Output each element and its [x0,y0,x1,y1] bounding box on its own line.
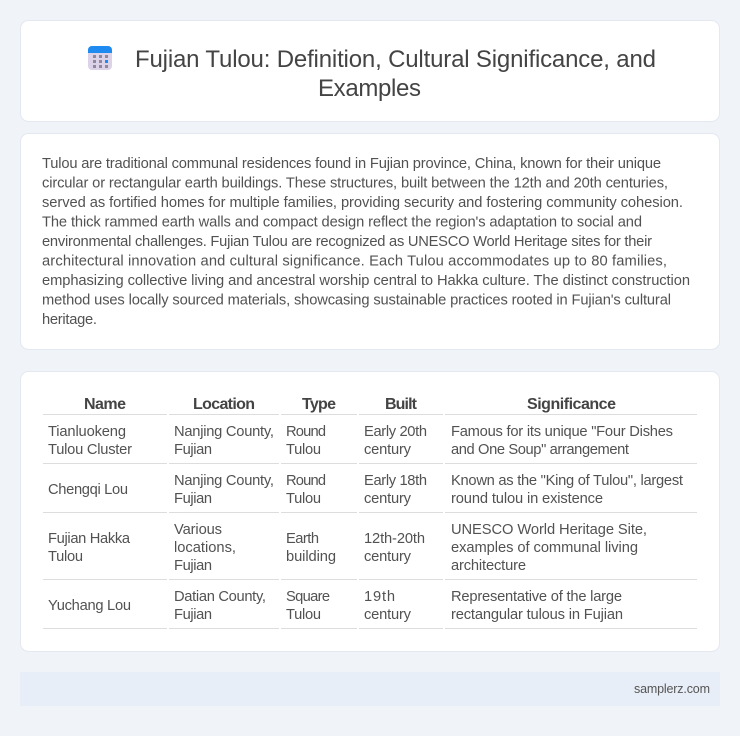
table row: Chengqi Lou: Early 18th [364,473,427,489]
text block: description paragraph: method uses locally sourced materials, showcasing sustainable practices rooted in Fujian's cultural [42,292,671,308]
table row: Yuchang Lou [48,589,623,623]
table row: Fujian Hakka Tulou: Fujian Hakka [48,531,131,547]
table row: Yuchang Lou: Fujian [174,607,212,623]
table row: Tianluokeng Tulou Cluster: Nanjing County, [174,424,274,440]
table row: Chengqi Lou: Round [286,473,326,489]
title [135,46,656,102]
icon: calendar [88,46,112,70]
table row: Chengqi Lou: Chengqi Lou [48,482,128,498]
table header row: Significance [527,396,616,413]
text block: description paragraph: environmental challenges. Fujian Tulou are recognized as UNESCO World Heritage sites for their [42,234,652,250]
table row: Tianluokeng Tulou Cluster: Fujian [174,442,212,458]
table row: Chengqi Lou: round tulou in existence [451,491,603,507]
table row: Tianluokeng Tulou Cluster: Tianluokeng [48,424,126,440]
text block: description paragraph: architectural innovation and cultural significance. Each Tulou accommodates up to 80 families, [42,254,667,270]
table row: Tianluokeng Tulou Cluster: Famous for its unique "Four Dishes [451,424,673,440]
table row: Yuchang Lou: 19th [364,589,395,605]
table row: Tianluokeng Tulou Cluster: Early 20th [364,424,427,440]
table row: Fujian Hakka Tulou: building [286,549,336,565]
text block: description paragraph: heritage. [42,312,97,328]
table row: Tianluokeng Tulou Cluster: Tulou [286,442,321,458]
table row: Yuchang Lou: Representative of the large [451,589,622,605]
text block: description paragraph: served as fortified homes for multiple families, providing security and fostering community cohesion. [42,195,683,211]
title: Examples [318,75,421,102]
table row: Chengqi Lou: Fujian [174,491,212,507]
table row: Yuchang Lou: Square [286,589,330,605]
table row: Fujian Hakka Tulou: century [364,549,412,565]
table row: Fujian Hakka Tulou [48,522,647,574]
table row: Tianluokeng Tulou Cluster [48,424,673,458]
table row: Fujian Hakka Tulou: architecture [451,558,526,574]
table header row: Type [302,396,336,413]
table header row: Location [193,396,255,413]
table row: Fujian Hakka Tulou: Tulou [48,549,83,565]
panel: table [20,372,720,652]
table row: Tianluokeng Tulou Cluster: Tulou Cluster [48,442,132,458]
text block: description paragraph: circular or rectangular earth buildings. These structures, built between the 12th and 20th centuries, [42,176,668,192]
title: Fujian Tulou: Definition, Cultural Significance, and [135,46,656,73]
text block: description paragraph [42,156,690,328]
footer text: samplerz.com: samplerz.com [634,682,710,696]
text block: description paragraph: emphasizing collective living and ancestral worship central to Hakka culture. The distinct construction [42,273,690,289]
table row: Fujian Hakka Tulou: 12th-20th [364,531,425,547]
table row: Yuchang Lou: rectangular tulous in Fujian [451,607,623,623]
table header row: Name [84,396,126,413]
table row: Yuchang Lou: century [364,607,412,623]
table row: Tianluokeng Tulou Cluster: century [364,442,412,458]
table row: Fujian Hakka Tulou: examples of communal living [451,540,638,556]
table header row [84,396,616,413]
table row: Fujian Hakka Tulou: locations, [174,540,236,556]
table row: Yuchang Lou: Datian County, [174,589,266,605]
table header row: Built [385,396,418,413]
table row: Fujian Hakka Tulou: Earth [286,531,319,547]
table row: Tianluokeng Tulou Cluster: Round [286,424,326,440]
table row: Chengqi Lou: century [364,491,412,507]
table row: Fujian Hakka Tulou: Fujian [174,558,212,574]
text block: description paragraph: The thick rammed earth walls and compact design reflect the region's adaptation to social and [42,214,642,230]
panel: description [20,134,720,350]
table row: Fujian Hakka Tulou: Various [174,522,222,538]
table row: Tianluokeng Tulou Cluster: and One Soup" arrangement [451,442,629,458]
table row: Chengqi Lou [48,473,683,507]
table row: Yuchang Lou: Tulou [286,607,321,623]
text block: description paragraph: Tulou are traditional communal residences found in Fujian province, China, known for their unique [42,156,661,172]
panel: header [20,20,720,122]
table row: Chengqi Lou: Nanjing County, [174,473,274,489]
table row: Fujian Hakka Tulou: UNESCO World Heritage Site, [451,522,647,538]
table row: Chengqi Lou: Known as the "King of Tulou", largest [451,473,683,489]
footer [20,672,720,706]
table row: Chengqi Lou: Tulou [286,491,321,507]
table row: Yuchang Lou: Yuchang Lou [48,598,131,614]
